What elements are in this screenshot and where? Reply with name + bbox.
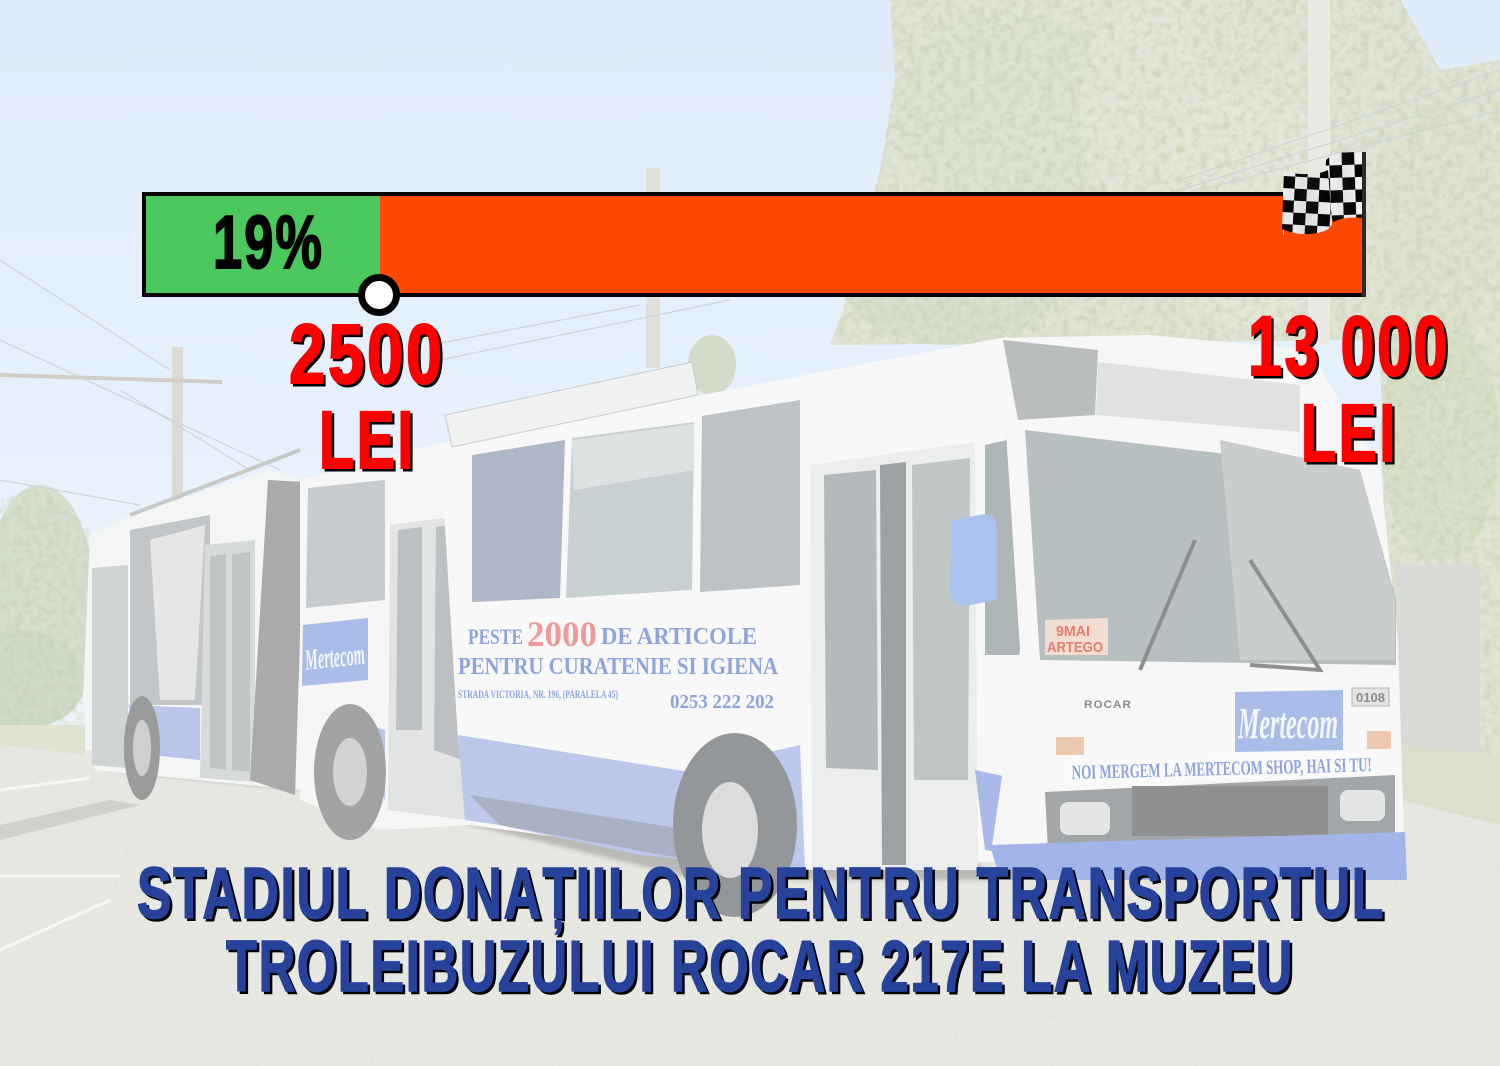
destination sign in windshield: ARTEGO <box>1047 639 1103 656</box>
utility poles and wires <box>0 0 1500 507</box>
percentage label: 19% <box>213 200 324 284</box>
green progress segment <box>146 196 380 293</box>
left tree <box>0 485 95 730</box>
icon: checkered finish flag <box>1282 152 1366 297</box>
advertising text on bus side: DE ARTICOLE <box>601 624 757 650</box>
advertising text on bus side: 2000 <box>527 614 597 654</box>
foliage texture <box>0 0 1500 754</box>
logo on bus front: Mertecom <box>1237 699 1338 748</box>
articulation bellows <box>250 480 305 795</box>
current amount label: 2500 <box>289 307 445 401</box>
bus front <box>950 335 1407 880</box>
trolleybus middle section: Mertecom <box>303 638 366 677</box>
advertising text on bus side: STRADA VICTORIA, NR. 196, (PARALELA 45) <box>458 687 618 701</box>
target amount label <box>1248 299 1450 479</box>
trolleybus rear section <box>83 450 300 800</box>
bar outline <box>144 194 1364 295</box>
destination sign in windshield <box>1045 618 1108 656</box>
progress bar <box>144 194 1364 312</box>
current amount label: LEI <box>319 395 416 486</box>
advertising text on bus side <box>458 614 779 713</box>
model badge: ROCAR <box>1084 699 1132 711</box>
progress marker <box>362 278 396 312</box>
advertising text on bus side: PENTRU CURATENIE SI IGIENA <box>458 654 779 680</box>
trees on the right <box>830 0 1500 800</box>
number plate <box>1352 688 1389 706</box>
trolleybus middle section <box>300 435 470 840</box>
current amount label <box>289 307 445 486</box>
advertising text on bus side: 0253 222 202 <box>670 691 774 713</box>
remaining segment <box>144 194 1364 295</box>
ground <box>0 725 1500 1066</box>
tree behind bus roof <box>688 335 736 395</box>
roof equipment <box>445 362 698 447</box>
number plate: 0108 <box>1356 690 1385 705</box>
target amount label: LEI <box>1301 388 1398 479</box>
title <box>137 854 1385 1007</box>
advertising text on bus side: PESTE <box>468 624 523 649</box>
destination sign in windshield: 9MAI <box>1056 623 1090 640</box>
trolleybus main body side <box>440 338 1045 917</box>
fence <box>1395 565 1480 755</box>
